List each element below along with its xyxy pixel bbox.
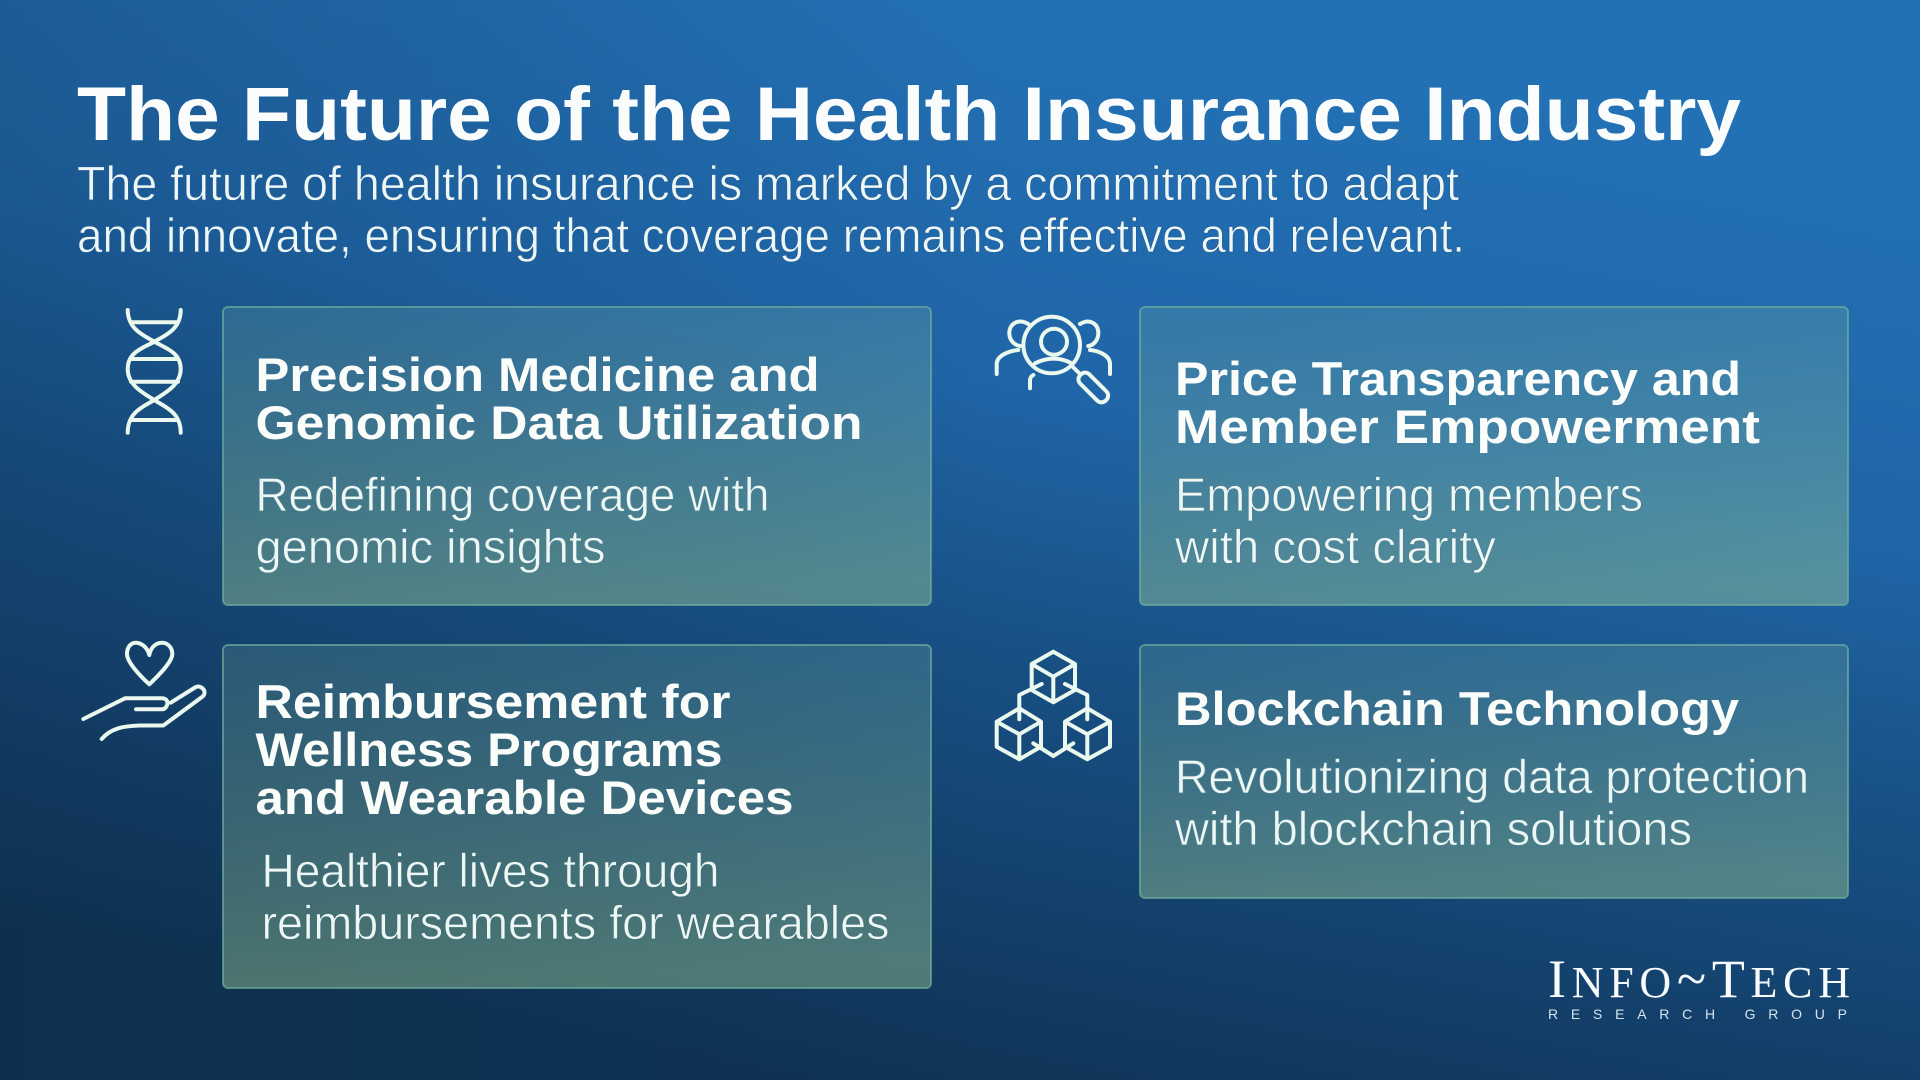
text: reimbursement description: Healthier lives through: [262, 844, 720, 897]
text: blockchain description: Revolutionizing data protection: [1175, 750, 1809, 803]
text: reimbursement description: [262, 844, 890, 949]
icon: connected blocks: [997, 652, 1110, 759]
heading: precision medicine: [256, 348, 862, 449]
heading: price transparency: [1175, 352, 1760, 453]
heading: reimbursement for wellness: [256, 675, 794, 824]
text: reimbursement description: reimbursements for wearables: [262, 896, 890, 949]
icon: DNA helix: [128, 310, 181, 433]
text: precision medicine description: genomic insights: [256, 520, 606, 573]
text: precision medicine description: [256, 468, 770, 573]
subtitle: and innovate, ensuring that coverage remains effective and relevant.: [77, 210, 1465, 263]
heading: price transparency: Price Transparency and: [1175, 352, 1741, 405]
panel: precision medicine: [223, 307, 931, 605]
text: price transparency description: with cost clarity: [1174, 520, 1496, 573]
text: blockchain description: with blockchain solutions: [1174, 802, 1692, 855]
heading: blockchain technology: Blockchain Technology: [1175, 682, 1739, 735]
title: The Future of the Health Insurance Industry: [77, 72, 1741, 157]
subtitle: [77, 158, 1465, 263]
text: blockchain description: [1174, 750, 1809, 855]
panel: blockchain technology: [1140, 645, 1848, 898]
logo: Info-Tech Research Group: RESEARCH GROUP: [1548, 1006, 1847, 1022]
heading: reimbursement for wellness: Wellness Programs: [256, 723, 722, 776]
heading: reimbursement for wellness: and Wearable Devices: [256, 771, 794, 824]
panel: price transparency: [1140, 307, 1848, 605]
heading: reimbursement for wellness: Reimbursement for: [256, 675, 730, 728]
heading: precision medicine: Precision Medicine and: [256, 348, 820, 401]
heading: price transparency: Member Empowerment: [1175, 400, 1760, 453]
text: precision medicine description: Redefining coverage with: [256, 468, 770, 521]
heading: precision medicine: Genomic Data Utilization: [256, 396, 862, 449]
text: price transparency description: [1174, 468, 1643, 573]
icon: heart in hand: [83, 643, 205, 739]
icon: people with magnifying glass: [997, 317, 1111, 405]
text: price transparency description: Empowering members: [1175, 468, 1643, 521]
logo: Info-Tech Research Group: INFO~TECH: [1548, 949, 1850, 1009]
subtitle: The future of health insurance is marked by a commitment to adapt: [77, 158, 1459, 211]
panel: reimbursement for wellness: [223, 645, 931, 988]
